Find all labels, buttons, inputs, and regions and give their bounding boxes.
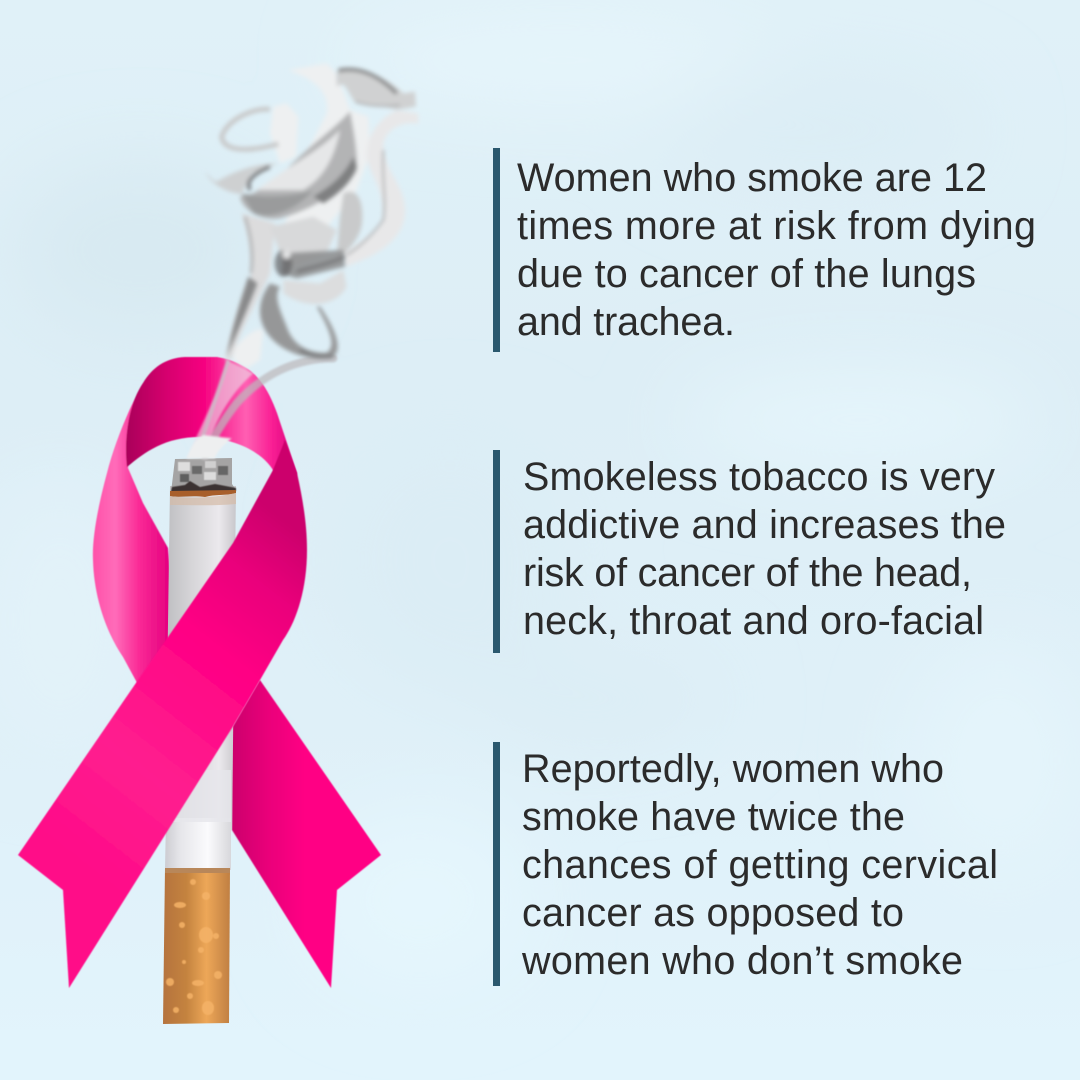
fact block 2 (493, 450, 1006, 653)
cigarette (163, 458, 236, 1024)
fact text 1: times more at risk from dying (517, 204, 1036, 248)
ribbon top arch (126, 357, 297, 520)
accent bar (493, 742, 500, 986)
fact text 2 (523, 455, 1006, 643)
fact text 1: and trachea. (517, 300, 735, 344)
smoke white masses (225, 63, 418, 368)
fact text 2: risk of cancer of the head, (523, 551, 972, 595)
fact text 1: due to cancer of the lungs (517, 252, 976, 296)
fact text 2: addictive and increases the (523, 503, 1006, 547)
fact block 1 (493, 148, 1036, 352)
fact text 3: Reportedly, women who (522, 747, 944, 791)
smoke plume (186, 63, 418, 458)
smoke dark knot (275, 249, 292, 277)
fact text 3: smoke have twice the (522, 795, 905, 839)
ribbon right tail (232, 680, 381, 988)
fact text 1 (517, 156, 1036, 344)
accent bar (493, 450, 500, 653)
fact text 2: Smokeless tobacco is very (523, 455, 995, 499)
fact text 3 (521, 747, 998, 983)
fact text 3: cancer as opposed to (522, 891, 904, 935)
ribbon left loop side (93, 383, 175, 690)
fact text 2: neck, throat and oro-facial (523, 599, 984, 643)
burn line (170, 490, 236, 497)
smoke grey folds (205, 69, 416, 359)
fact text 3: chances of getting cervical (522, 843, 998, 887)
fact text 1: Women who smoke are 12 (517, 156, 987, 200)
smoke trails over ribbon (186, 358, 333, 458)
pink ribbon: front band and left tail (18, 440, 307, 988)
cigarette white band (165, 818, 231, 870)
accent bar (493, 148, 500, 352)
cigarette paper (165, 486, 236, 830)
cigarette filter (163, 868, 230, 1024)
cigarette ash tip (170, 458, 236, 505)
fact text 3: women who don’t smoke (521, 939, 963, 983)
fact block 3 (493, 742, 998, 986)
pink ribbon: back band, left loop and right tail (93, 357, 381, 988)
